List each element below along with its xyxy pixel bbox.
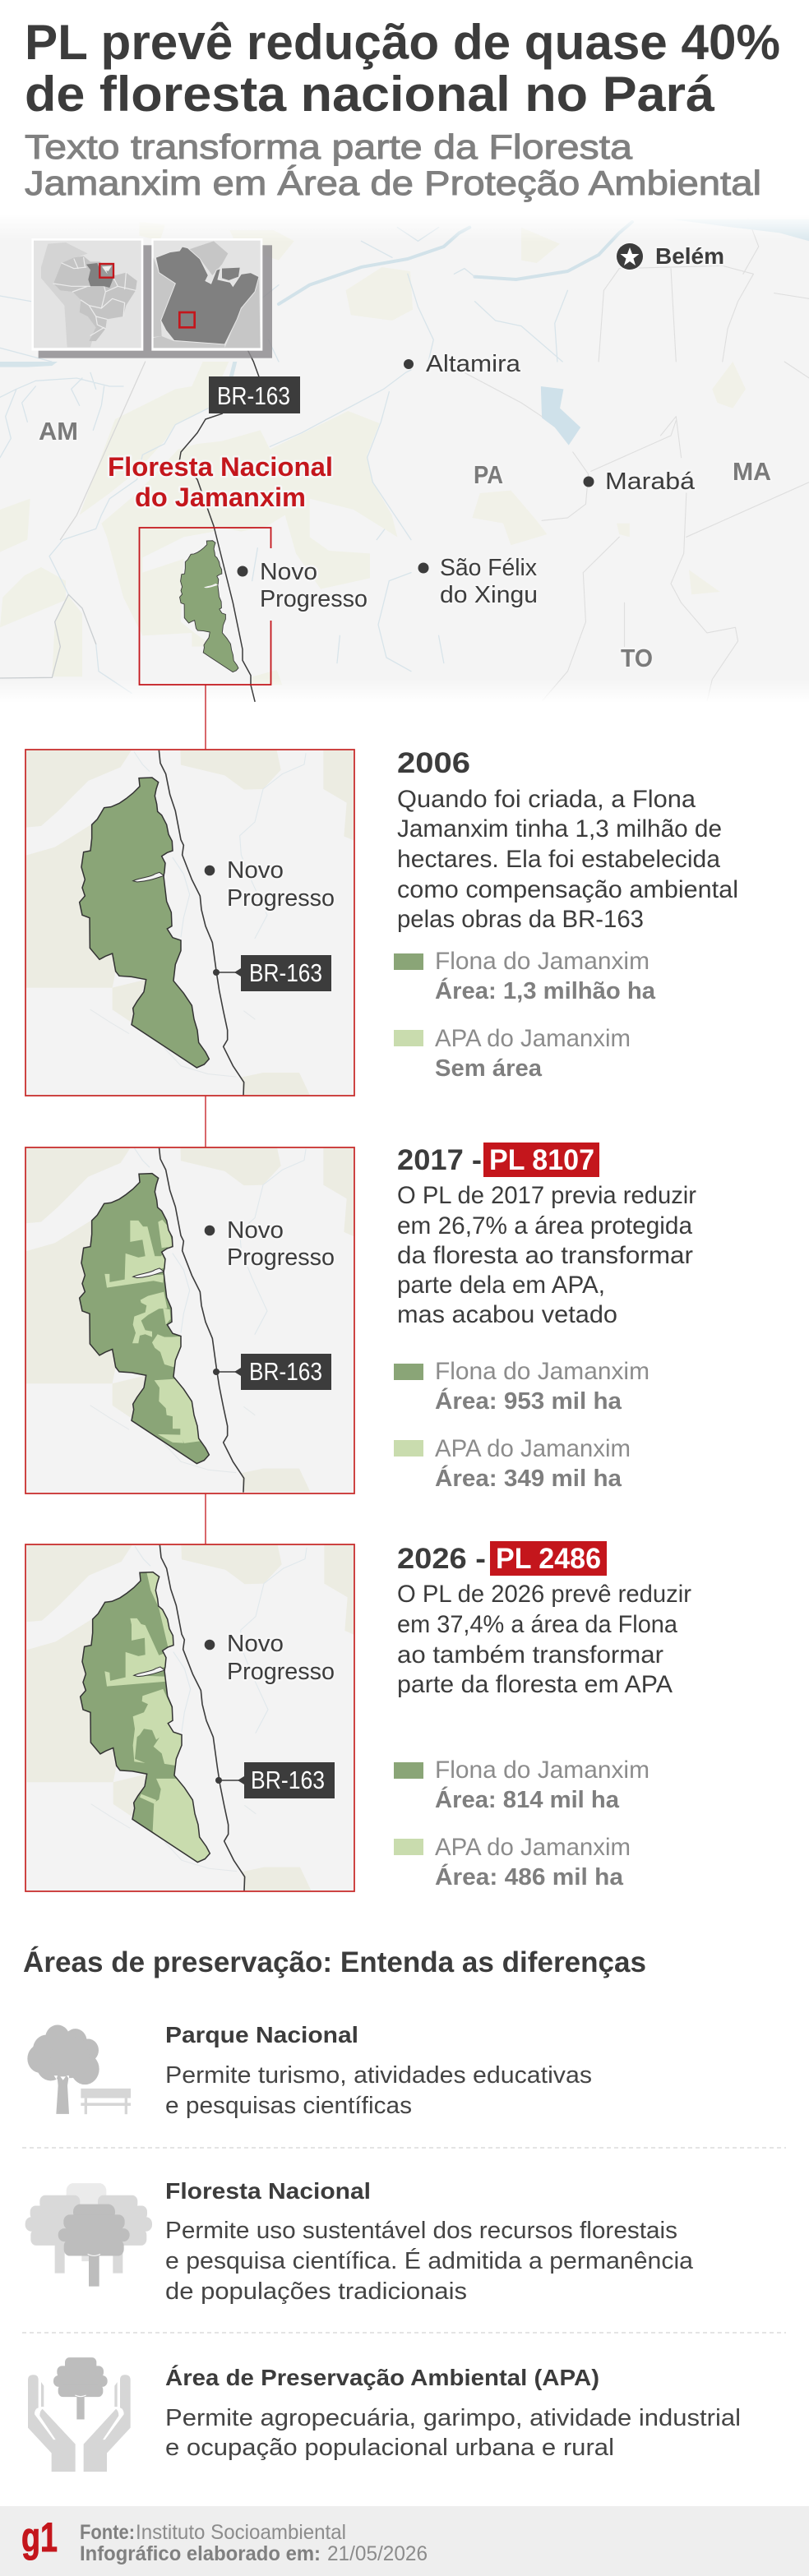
text: Parque Nacional: Permite turismo, atividades educativas xyxy=(165,2062,592,2089)
city: Marabá: Marabá xyxy=(605,469,696,495)
text: APA: Área de Preservação Ambiental (APA) xyxy=(165,2365,599,2390)
city: Novo Progresso: Novo xyxy=(260,559,317,585)
text block: 2026: 2026 - xyxy=(397,1543,486,1575)
label: BR-163: BR-163 xyxy=(249,1357,322,1386)
text block: 2006: Quando foi criada, a Flona xyxy=(397,786,696,813)
legend: 2006: Flona do Jamanxim xyxy=(435,948,650,975)
legend: 2026: Área: 814 mil ha xyxy=(435,1785,620,1813)
state labels xyxy=(39,417,771,672)
label: Novo Progresso: Progresso xyxy=(227,1659,335,1685)
text: Parque Nacional: Parque Nacional xyxy=(165,2022,358,2047)
text block: 2026: PL 2486 xyxy=(496,1543,601,1575)
footer xyxy=(0,2506,809,2576)
text: Floresta Nacional: Floresta Nacional xyxy=(165,2178,371,2204)
city: Belém xyxy=(615,242,724,271)
source text: Fonte: xyxy=(80,2521,135,2544)
title: de floresta nacional no Pará xyxy=(25,67,715,122)
text: Parque Nacional: e pesquisas científicas xyxy=(165,2093,412,2119)
locator insets xyxy=(31,238,272,358)
map fade xyxy=(0,214,809,242)
shape: Flona 2006 xyxy=(80,778,209,1068)
text block: 2017: O PL de 2017 previa reduzir xyxy=(397,1182,696,1209)
label: Novo Progresso: Novo xyxy=(227,1217,284,1244)
map shape: Flona do Jamanxim xyxy=(180,541,238,672)
subtitle xyxy=(25,127,761,202)
icon: forest trees xyxy=(25,2183,152,2287)
text block: 2026: em 37,4% a área da Flona xyxy=(397,1611,677,1638)
label: Novo Progresso: Novo xyxy=(227,857,284,884)
inset: red frame around Flona xyxy=(140,528,271,685)
map terrain lower right xyxy=(377,362,809,701)
label: Floresta Nacional do Jamanxim: do Jamanxim xyxy=(135,482,306,512)
logo: g1: g1 xyxy=(21,2514,58,2560)
legend: 2026: Área: 486 mil ha xyxy=(435,1863,624,1890)
label: BR-163 xyxy=(215,1762,335,1798)
label: BR-163 on main map xyxy=(209,376,300,413)
inset shadow xyxy=(39,245,272,358)
icon: park tree and bench xyxy=(27,2024,131,2114)
text: Floresta Nacional: e pesquisa científica. É admitida a permanência xyxy=(165,2247,694,2274)
legend: 2006 xyxy=(394,948,656,1082)
text block: 2017: em 26,7% a área protegida xyxy=(397,1212,692,1240)
label: Novo Progresso xyxy=(205,1217,335,1271)
source text: Instituto Socioambiental xyxy=(136,2521,346,2544)
title xyxy=(25,15,780,122)
source text: Infográfico elaborado em: xyxy=(80,2542,321,2565)
text block: 2006: como compensação ambiental xyxy=(397,876,738,903)
icon: hands holding tree xyxy=(28,2357,131,2472)
label: BR-163: BR-163 xyxy=(249,958,322,987)
legend: 2006: Sem área xyxy=(435,1055,543,1082)
legend: 2026: Flona do Jamanxim xyxy=(435,1757,650,1784)
text block: 2006: hectares. Ela foi estabelecida xyxy=(397,846,720,873)
map terrain upper xyxy=(0,219,809,362)
legend: 2006: Área: 1,3 milhão ha xyxy=(435,976,656,1004)
label: Floresta Nacional do Jamanxim: Floresta Nacional xyxy=(108,452,333,482)
city: São Félix do Xingu: do Xingu xyxy=(440,582,538,608)
text: Parque Nacional xyxy=(165,2022,592,2119)
text: Floresta Nacional: de populações tradicionais xyxy=(165,2278,467,2305)
legend: 2017: APA do Jamanxim xyxy=(435,1435,631,1462)
shape: Flona 2017 xyxy=(80,1174,209,1464)
text: Floresta Nacional xyxy=(165,2178,694,2305)
label: BR-163: BR-163 xyxy=(251,1766,325,1794)
text block: 2006: pelas obras da BR-163 xyxy=(397,906,644,933)
inset: Pará xyxy=(151,238,262,351)
subtitle: Texto transforma parte da Floresta xyxy=(25,127,633,166)
state labels: TO xyxy=(621,644,653,672)
label: BR-163 on main map: BR-163 xyxy=(217,381,290,410)
legend: 2017: Flona do Jamanxim xyxy=(435,1358,650,1385)
text block: 2017: mas acabou vetado xyxy=(397,1301,617,1328)
text: APA: e ocupação populacional urbana e rural xyxy=(165,2435,614,2461)
legend: 2006: APA do Jamanxim xyxy=(435,1025,631,1052)
city: Novo Progresso xyxy=(237,559,368,612)
legend: 2026 xyxy=(394,1757,650,1890)
text block: 2026: parte da floresta em APA xyxy=(397,1671,673,1698)
state labels: AM xyxy=(39,417,78,445)
label: BR-163 xyxy=(213,1354,331,1390)
city: Novo Progresso: Progresso xyxy=(260,586,368,612)
title: PL prevê redução de quase 40% xyxy=(25,15,780,70)
source text: 21/05/2026 xyxy=(327,2542,428,2565)
source text xyxy=(80,2521,428,2565)
text block: 2017: da floresta ao transformar xyxy=(397,1242,693,1269)
city: Belém: Belém xyxy=(655,243,724,269)
text: APA xyxy=(165,2365,741,2461)
label: Novo Progresso xyxy=(205,1631,335,1685)
panel: 2017 map xyxy=(25,1146,354,1493)
state labels: PA xyxy=(474,460,503,489)
city: São Félix do Xingu: São Félix xyxy=(440,555,537,581)
text: Floresta Nacional: Permite uso sustentável dos recursos florestais xyxy=(165,2218,677,2244)
label: BR-163 xyxy=(213,955,331,991)
text block: 2017: parte dela em APA, xyxy=(397,1272,605,1299)
label: Novo Progresso: Progresso xyxy=(227,1244,335,1271)
text block: 2026 xyxy=(397,1541,691,1698)
label: Novo Progresso: Novo xyxy=(227,1631,284,1657)
legend: 2017: Área: 349 mil ha xyxy=(435,1464,622,1492)
inset: Brazil xyxy=(31,238,143,351)
legend: 2017 xyxy=(394,1358,650,1492)
text block: 2006 xyxy=(397,747,738,933)
text block: 2017: PL 8107 xyxy=(489,1144,594,1176)
text block: 2026: O PL de 2026 prevê reduzir xyxy=(397,1581,691,1608)
legend: 2026: APA do Jamanxim xyxy=(435,1834,631,1861)
text block: 2006: 2006 xyxy=(397,747,470,779)
road BR-163 on main map xyxy=(179,351,259,701)
state labels: MA xyxy=(733,457,771,486)
text block: 2026: ao também transformar xyxy=(397,1641,663,1669)
text block: 2017 xyxy=(397,1143,696,1328)
legend: 2017: Área: 953 mil ha xyxy=(435,1387,622,1415)
shape: Flona 2026 xyxy=(81,1567,214,1866)
panel: 2026 map xyxy=(25,1544,355,1891)
text block: 2006: Jamanxim tinha 1,3 milhão de xyxy=(397,815,722,843)
city: São Félix do Xingu xyxy=(418,555,538,608)
text: APA: Permite agropecuária, garimpo, atividade industrial xyxy=(165,2405,741,2431)
connector line xyxy=(205,685,206,1544)
city: Altamira: Altamira xyxy=(426,351,521,377)
panel: 2006 map xyxy=(25,750,354,1096)
label: Novo Progresso xyxy=(205,857,335,912)
main locator map xyxy=(0,214,809,703)
subtitle: Jamanxim em Área de Proteção Ambiental xyxy=(25,164,761,202)
text block: 2017: 2017 - xyxy=(397,1144,482,1176)
label: Floresta Nacional do Jamanxim xyxy=(108,452,333,512)
map terrain lower left xyxy=(0,362,411,693)
heading: preservation areas: Áreas de preservação: Entenda as diferenças xyxy=(23,1946,646,1978)
label: Novo Progresso: Progresso xyxy=(227,885,335,912)
